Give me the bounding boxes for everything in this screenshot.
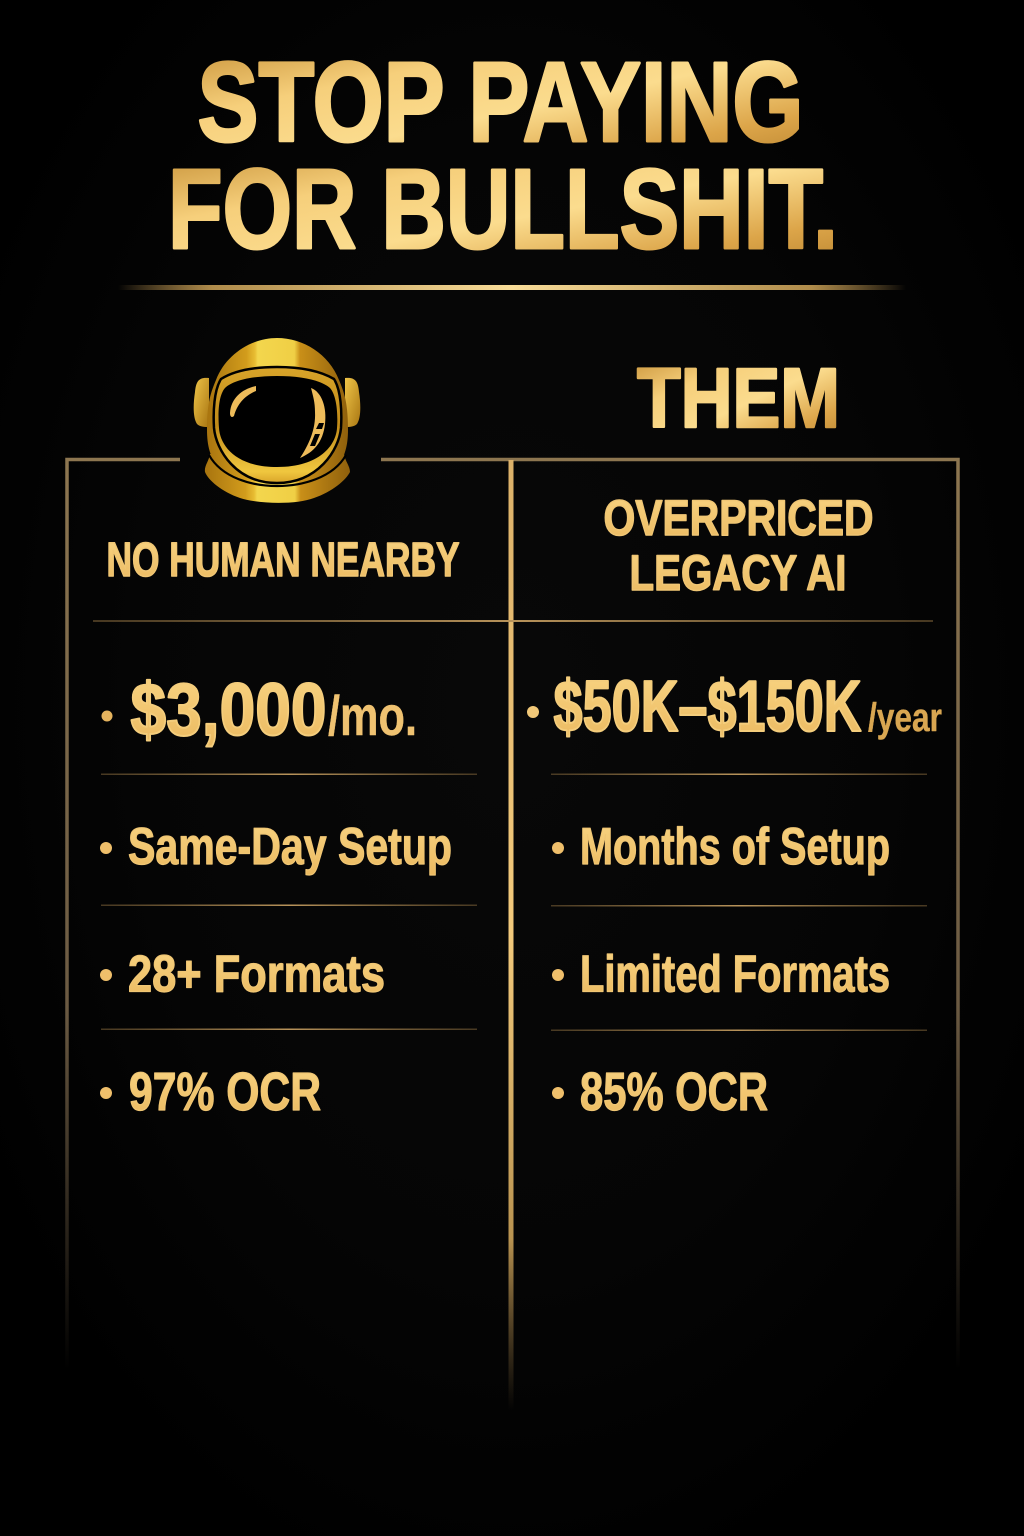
right row: formats: Limited Formats [580,946,890,1004]
left row: price: $3,000 [130,668,326,751]
right row: setup: Months of Setup [580,818,890,876]
icon: astronaut helmet [194,338,360,503]
comparison table frame [67,460,958,1410]
column header: them: THEM [637,351,840,445]
column subheading: overpriced legacy AI [604,490,874,601]
title: STOP PAYING [198,39,804,165]
right row: price: $50K–$150K [554,667,862,747]
left row: price: /mo. [328,684,417,747]
column subheading: overpriced legacy AI: LEGACY AI [630,545,846,601]
left row: formats: 28+ Formats [128,946,385,1004]
title: FOR BULLSHIT. [168,146,838,272]
left row: setup: Same-Day Setup [128,818,452,876]
title [168,39,838,272]
right row: OCR: 85% OCR [580,1062,768,1122]
right row: price: /year [868,696,942,740]
left row: OCR: 97% OCR [129,1062,321,1122]
right row: OCR [552,1062,768,1122]
column subheading: overpriced legacy AI: OVERPRICED [604,490,874,546]
column subheading: no human nearby: NO HUMAN NEARBY [106,534,460,587]
